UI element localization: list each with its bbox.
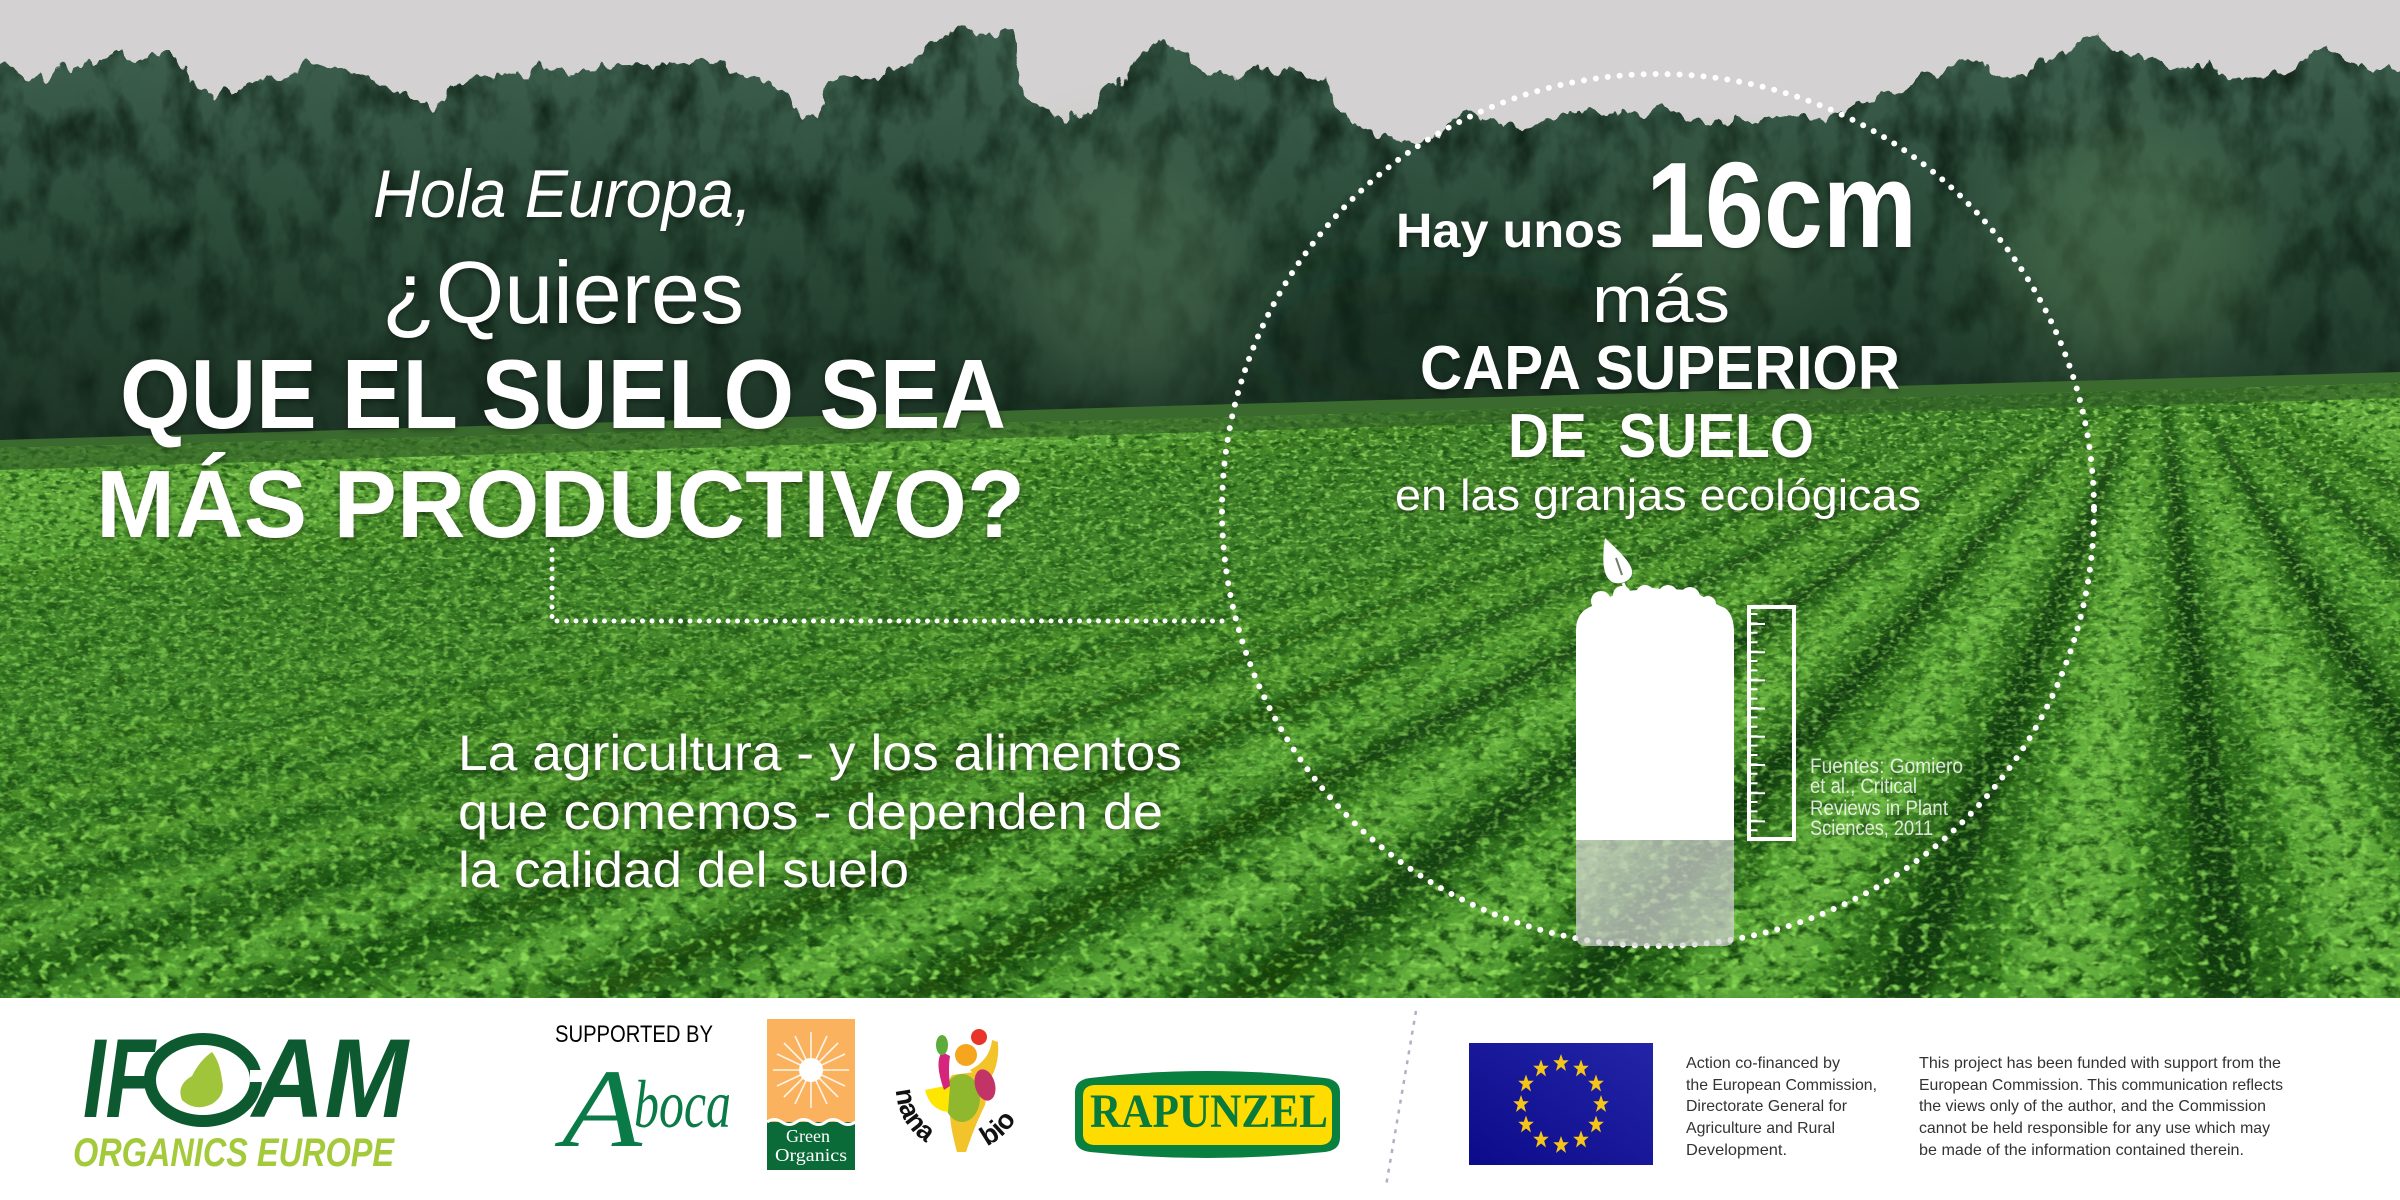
logo: nana bio [896, 1029, 1014, 1152]
text block: co-financing note: the European Commission, [1686, 1077, 1877, 1094]
potato field with rows [0, 340, 2400, 1000]
text block: co-financing note: Development. [1686, 1142, 1787, 1159]
dotted circle [1222, 74, 2094, 946]
text block: funding disclaimer: the views only of the author, and the Commission [1919, 1098, 2266, 1115]
text block: funding disclaimer: European Commission. This communication reflects [1919, 1077, 2283, 1094]
logo: nana bio: nana [896, 1090, 932, 1143]
logo: Aboca: A [554, 1047, 643, 1171]
logo: Aboca: boca [634, 1066, 731, 1142]
heading: 16cm statistic: más [1592, 262, 1730, 336]
heading: 16cm statistic: 16cm [1646, 137, 1917, 273]
text block: agriculture statement: que comemos - dependen de [458, 784, 1163, 840]
heading: left question [96, 156, 1025, 558]
dotted connector line [552, 550, 1224, 621]
text block: agriculture statement: la calidad del suelo [458, 842, 909, 898]
text block: funding disclaimer: be made of the information contained therein. [1919, 1142, 2244, 1159]
logo: Green Organics [767, 1019, 855, 1170]
EU flag [1469, 1043, 1653, 1165]
text block: agriculture statement: La agricultura - y los alimentos [458, 725, 1182, 781]
logo: IFOAM Organics Europe [73, 1016, 410, 1175]
logo: IFOAM Organics Europe: ORGANICS EUROPE [73, 1131, 395, 1175]
logo: IFOAM Organics Europe: IF [83, 1016, 157, 1141]
source citation: Fuentes: Gomiero [1810, 755, 1963, 778]
text block: funding disclaimer [1919, 1055, 2283, 1159]
forest tree line [0, 23, 2400, 467]
source citation [1810, 755, 1963, 840]
heading: left question: QUE EL SUELO SEA [120, 339, 1006, 449]
source citation: et al., Critical [1810, 775, 1917, 798]
footer panel [0, 998, 2400, 1200]
heading: 16cm statistic: DE SUELO [1508, 402, 1814, 471]
text block: agriculture statement [458, 725, 1182, 898]
heading: left question: MÁS PRODUCTIVO? [96, 451, 1025, 558]
label: supported by: SUPPORTED BY [555, 1021, 713, 1048]
source citation: Reviews in Plant [1810, 797, 1948, 820]
text block: co-financing note: Directorate General for [1686, 1098, 1848, 1115]
logo: Rapunzel [1075, 1071, 1340, 1158]
text block: co-financing note: Agriculture and Rural [1686, 1120, 1835, 1137]
logo: Green Organics: Green [786, 1126, 830, 1146]
logo: Green Organics: Organics [775, 1145, 847, 1165]
logo: nana bio: bio [978, 1114, 1014, 1146]
text block: funding disclaimer: This project has been funded with support from the [1919, 1055, 2281, 1072]
heading: 16cm statistic: Hay unos [1396, 205, 1623, 258]
heading: left question: Hola Europa, [373, 156, 752, 232]
ruler [1749, 607, 1794, 839]
heading: 16cm statistic: en las granjas ecológicas [1395, 471, 1921, 520]
logo: Aboca [554, 1047, 731, 1171]
icon: soil candle with leaf [1576, 538, 1734, 946]
logo: IFOAM Organics Europe: AM [249, 1016, 410, 1141]
logo: Rapunzel: RAPUNZEL [1090, 1085, 1328, 1138]
source citation: Sciences, 2011 [1810, 817, 1933, 840]
text block: co-financing note [1686, 1055, 1877, 1159]
heading: 16cm statistic: CAPA SUPERIOR [1420, 334, 1900, 403]
dashed separator [1386, 1011, 1416, 1186]
heading: left question: ¿Quieres [382, 243, 744, 342]
sky background [0, 0, 2400, 460]
text block: funding disclaimer: cannot be held responsible for any use which may [1919, 1120, 2270, 1137]
text block: co-financing note: Action co-financed by [1686, 1055, 1840, 1072]
heading: 16cm statistic [1395, 137, 1921, 520]
